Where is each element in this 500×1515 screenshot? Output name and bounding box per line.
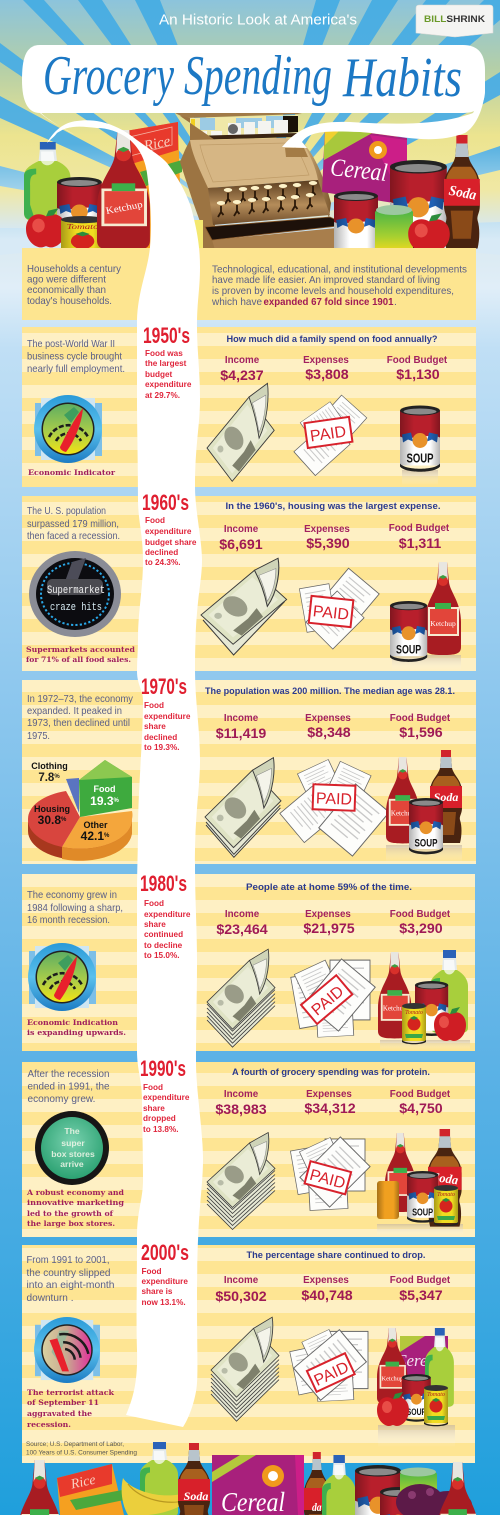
ribbon text: 1970s: share xyxy=(144,722,166,731)
text: intro right: expanded 67 fold since 1901 xyxy=(264,297,394,308)
stat: food budget: Food Budget xyxy=(390,1275,451,1286)
text: 1980s context xyxy=(27,890,123,926)
icon: food ketchup and soup: Ketchup xyxy=(430,619,456,628)
stat: food budget: Food Budget xyxy=(390,1089,451,1100)
label: clothing: % xyxy=(54,774,60,780)
ribbon text: 1990s: Food xyxy=(143,1083,163,1092)
ribbon text: 1950s: expenditure xyxy=(145,380,192,389)
icon: food group: Tomato xyxy=(427,1392,445,1398)
stat: income: $6,691 xyxy=(219,537,263,553)
icon: soup can: SOUP xyxy=(406,450,434,466)
label: other: 42.1 xyxy=(81,829,104,843)
ribbon text: 2000s: expenditure xyxy=(142,1277,188,1286)
text: 1980s context: 16 month recession. xyxy=(27,915,110,926)
icon: bananas xyxy=(122,1478,194,1515)
label: food: 19.3 xyxy=(90,794,114,808)
icon: soda right: Soda xyxy=(448,182,478,204)
icon: money xyxy=(201,558,287,655)
ribbon text: 1960s: Food xyxy=(145,516,165,525)
stat: income xyxy=(215,1275,267,1305)
icon: food ketchup and soup: SOUP xyxy=(396,642,421,656)
heading: 1980s: People ate at home 59% of the time. xyxy=(246,882,412,893)
icon: box stores badge: box stores xyxy=(51,1149,95,1159)
stat: food budget xyxy=(389,523,450,552)
text: 1980s context: The economy grew in xyxy=(27,890,117,901)
stat: food budget: Food Budget xyxy=(389,523,450,534)
stat: expenses: Expenses xyxy=(303,1275,349,1286)
icon: rice box: Rice xyxy=(69,1473,97,1493)
ribbon text: 2000s xyxy=(141,1240,189,1307)
label: clothing xyxy=(31,761,68,784)
caption: supermarkets xyxy=(26,645,135,664)
stat: expenses xyxy=(303,355,349,383)
icon: money xyxy=(211,1317,279,1421)
text: 1960s context xyxy=(27,506,120,542)
stat: income: Income xyxy=(224,524,259,535)
ribbon text: 1960s: budget share xyxy=(145,538,197,547)
caption: indication: Economic Indication xyxy=(27,1018,119,1027)
label: food: % xyxy=(114,798,120,804)
icon: food ketchup and soup xyxy=(390,562,461,670)
text: 1970s context: 1973, then declined until xyxy=(27,718,130,729)
stat: expenses xyxy=(301,1275,353,1304)
icon: ketchup large: Ketchup xyxy=(105,200,144,217)
subtitle: An Historic Look at America's xyxy=(159,12,357,28)
icon: food ketchup soda soup: Ketchup xyxy=(391,810,415,818)
icon: money xyxy=(207,1132,275,1230)
caption: terrorist attack: aggravated the xyxy=(27,1409,92,1418)
ribbon text: 1990s xyxy=(140,1056,190,1134)
text: 1980s context: 1984 following a sharp, xyxy=(27,903,123,914)
text: 1950s context: nearly full employment. xyxy=(27,364,125,375)
ribbon text: 1950s: budget xyxy=(145,370,173,379)
ribbon text: 2000s: Food xyxy=(142,1267,162,1276)
icon: green bottle xyxy=(24,142,70,221)
icon: food group xyxy=(378,950,470,1050)
text: 1990s context: After the recession xyxy=(28,1069,110,1080)
ribbon text: 2000s: share is xyxy=(142,1287,173,1296)
stat: food budget: $4,750 xyxy=(399,1101,443,1117)
stat: food budget xyxy=(390,1089,451,1117)
source note xyxy=(26,1441,138,1456)
icon: big can right xyxy=(390,160,447,249)
icon: paid receipts: PAID xyxy=(309,424,347,445)
label: housing: % xyxy=(61,817,67,823)
text: 1990s context: economy grew. xyxy=(28,1094,96,1105)
icon: red can center xyxy=(334,191,378,257)
stat: expenses xyxy=(303,909,355,937)
ribbon text: 1960s: expenditure xyxy=(145,527,192,536)
ribbon text: 1960s: to 24.3%. xyxy=(145,558,180,567)
icon: paid receipts xyxy=(280,759,389,856)
stat: income: $4,237 xyxy=(220,368,264,384)
keys xyxy=(217,181,317,217)
illustration: bottom food strip xyxy=(18,1442,478,1515)
stat: expenses: Expenses xyxy=(306,1089,352,1100)
icon: recession gauge xyxy=(34,1317,100,1383)
text: 1990s context: ended in 1991, the xyxy=(28,1082,110,1092)
stat: food budget: $1,596 xyxy=(399,725,443,741)
icon: food group: Cereal xyxy=(395,1351,441,1370)
icon: green bottle xyxy=(322,1455,355,1515)
icon: economic gauge xyxy=(28,943,96,1011)
panel: 1960s xyxy=(22,496,476,671)
stat: expenses xyxy=(304,1089,356,1117)
heading: 2000s: The percentage share continued to drop. xyxy=(246,1250,426,1261)
label: housing xyxy=(34,804,70,827)
text: intro right: which have xyxy=(211,297,262,308)
icon: box stores badge: The xyxy=(64,1126,80,1136)
text: intro left: Households a century xyxy=(27,264,122,275)
stat: food budget xyxy=(390,1275,451,1304)
stat: expenses: $3,808 xyxy=(305,367,349,383)
icon: food group: SOUP xyxy=(407,1407,426,1417)
label: housing: Housing xyxy=(34,804,70,814)
stat: expenses: $34,312 xyxy=(304,1101,356,1117)
text: 1950s context: The post-World War II xyxy=(27,339,115,350)
ribbon text: 1950s: 1950's xyxy=(143,323,190,348)
stat: expenses xyxy=(304,524,350,552)
text: intro left: economically than xyxy=(27,285,106,296)
text: 1970s context: 1975. xyxy=(27,731,50,742)
caption: economic indicator: Economic Indicator xyxy=(28,468,115,477)
ribbon text: 1980s: Food xyxy=(144,899,164,908)
stat: food budget: $3,290 xyxy=(399,921,443,937)
icon: green can xyxy=(400,1468,437,1503)
logo: BillShrink tag xyxy=(416,5,493,37)
stat: income: Income xyxy=(224,1089,259,1100)
stat: income xyxy=(219,524,263,553)
icon: food group: Tomato xyxy=(437,1192,455,1198)
caption: supermarkets: for 71% of all food sales. xyxy=(26,655,131,664)
icon: supermarket badge: Supermarket xyxy=(47,585,105,597)
stat: expenses: $5,390 xyxy=(306,536,350,552)
title xyxy=(43,45,462,109)
label: food: Food xyxy=(94,784,116,794)
icon: tomato can: Tomato xyxy=(67,223,99,231)
ribbon text: 1990s: share xyxy=(143,1104,165,1113)
icon: food ketchup soda soup: Soda xyxy=(434,790,458,804)
ribbon text: 1960s: declined xyxy=(145,548,178,557)
icon: paid receipts xyxy=(290,1330,368,1402)
icon: paid receipts xyxy=(291,959,375,1037)
ribbon text: 1970s: to 19.3%. xyxy=(144,743,180,752)
label: clothing: 7.8 xyxy=(38,772,54,784)
text: intro right: have made life easier. An improved standard of living xyxy=(212,275,440,286)
text: intro right: . xyxy=(394,297,397,308)
icon: soda: Soda xyxy=(184,1489,208,1503)
text: intro left: today's households. xyxy=(27,296,112,307)
ribbon text: 1990s: 1990's xyxy=(140,1056,186,1081)
panel: 1970s xyxy=(22,680,476,864)
text: intro right: is proven by income levels and household expenditures, xyxy=(212,286,454,297)
text: 1970s context xyxy=(27,694,134,742)
stat: income: Income xyxy=(224,713,259,724)
stat: food budget: $5,347 xyxy=(399,1288,443,1304)
stat: food budget: Food Budget xyxy=(390,713,451,724)
stat: income: Income xyxy=(225,355,260,366)
label: clothing: Clothing xyxy=(31,761,68,771)
text: intro left xyxy=(27,264,122,307)
icon: food group: Ketchup xyxy=(383,1005,407,1013)
ribbon text: 1980s xyxy=(140,871,191,960)
icon: food group xyxy=(377,1328,455,1447)
text: 2000s context: From 1991 to 2001, xyxy=(26,1255,110,1266)
ribbon text: 1980s: 1980's xyxy=(140,871,187,896)
ribbon text: 1950s: the largest xyxy=(145,359,187,368)
panel: 1980s xyxy=(22,874,475,1051)
icon: food group: Ketchup xyxy=(382,1376,403,1382)
stat: expenses: Expenses xyxy=(303,355,349,366)
ribbon text: 1970s xyxy=(141,674,191,752)
icon: soda right xyxy=(444,135,480,248)
chart: household spending pie xyxy=(28,760,132,861)
text: 1990s context xyxy=(28,1069,110,1105)
icon: paid receipts xyxy=(290,1137,370,1210)
title: Habits xyxy=(342,47,462,109)
text: 2000s context: the country slipped xyxy=(26,1268,111,1279)
stat: food budget: Food Budget xyxy=(390,909,451,920)
stat: income: Income xyxy=(224,1275,259,1286)
icon: food group xyxy=(377,1129,463,1235)
label: housing: 30.8 xyxy=(38,813,61,827)
ribbon text: 1980s: to decline xyxy=(144,941,183,950)
stat: food budget: Food Budget xyxy=(387,355,448,366)
text: 2000s context xyxy=(26,1255,115,1304)
panel: 2000s xyxy=(22,1245,475,1463)
icon: food group: Tomato xyxy=(405,1010,423,1016)
label: other xyxy=(81,820,110,843)
icon: paid receipts xyxy=(294,395,367,476)
icon: green bottle xyxy=(140,1442,178,1515)
icon: soup can xyxy=(400,406,440,485)
ribbon text: 1980s: expenditure xyxy=(144,910,191,919)
stat: expenses: Expenses xyxy=(304,524,350,535)
icon: soda: da xyxy=(312,1501,322,1514)
icon: food group: SOUP xyxy=(412,1207,433,1218)
text: 1960s context: The U. S. population xyxy=(27,506,106,517)
ribbon text: 1990s: to 13.8%. xyxy=(143,1125,178,1134)
icon: box stores badge: super xyxy=(61,1138,85,1148)
icon: tomato can xyxy=(61,216,104,266)
ribbon text: 1980s: share xyxy=(144,920,166,929)
panel: 1990s xyxy=(22,1062,475,1237)
stat: income: $50,302 xyxy=(215,1289,267,1305)
icon: food ketchup soda soup xyxy=(386,750,462,862)
icon: box stores badge: arrive xyxy=(60,1159,84,1169)
icon: supermarket badge: craze hits xyxy=(50,602,102,614)
illustration: header groceries and cash register xyxy=(24,109,480,266)
source note: 100 Years of U.S. Consumer Spending xyxy=(26,1450,138,1456)
stat: income: Income xyxy=(225,909,260,920)
icon: paid receipts: PAID xyxy=(312,603,350,624)
ribbon text: 2000s: now 13.1%. xyxy=(142,1298,186,1307)
icon: cereal box: Cereal xyxy=(329,154,389,187)
text: 1970s context: In 1972–73, the economy xyxy=(27,694,134,705)
icon: box stores badge xyxy=(35,1111,109,1185)
stat: expenses: $21,975 xyxy=(303,921,355,937)
icon: soda xyxy=(178,1443,210,1515)
text: 2000s context: into an eight-month xyxy=(26,1280,115,1291)
caption: terrorist attack: recession. xyxy=(27,1420,71,1429)
caption: indication: is expanding upwards. xyxy=(27,1028,126,1037)
caption: terrorist attack: of September 11 xyxy=(27,1398,99,1407)
caption: terrorist attack: The terrorist attack xyxy=(27,1388,115,1397)
icon: paid receipts: PAID xyxy=(312,1359,352,1390)
icon: paid receipts: PAID xyxy=(316,790,352,809)
text: 1970s context: expanded. It peaked in xyxy=(27,706,122,717)
icon: money xyxy=(207,383,274,481)
stat: expenses: $8,348 xyxy=(307,725,351,741)
panel: intro xyxy=(22,248,476,320)
stat: expenses xyxy=(305,713,351,741)
stat: income: $38,983 xyxy=(215,1102,267,1118)
stat: food budget: $1,130 xyxy=(396,367,440,383)
icon: soda xyxy=(304,1452,330,1515)
stat: income: $23,464 xyxy=(216,922,268,938)
banner: title ribbon xyxy=(22,45,485,113)
stat: expenses: Expenses xyxy=(305,713,351,724)
icon: paid receipts: PAID xyxy=(309,983,347,1019)
ribbon text: 1990s: dropped xyxy=(143,1114,176,1123)
text: 1950s context xyxy=(27,339,125,375)
stat: expenses: $40,748 xyxy=(301,1288,353,1304)
icon: ketchup bottom left xyxy=(18,1460,61,1515)
heading: 1970s: The population was 200 million. The median age was 28.1. xyxy=(205,686,455,697)
text: intro left: ago were different xyxy=(27,274,106,286)
stat: expenses: Expenses xyxy=(305,909,351,920)
heading: 1990s: A fourth of grocery spending was for protein. xyxy=(232,1067,430,1078)
heading: 1960s: In the 1960's, housing was the largest expense. xyxy=(226,501,440,512)
logo: BillShrink tag: BILLSHRINK xyxy=(424,14,485,25)
caption: box stores: the large box stores. xyxy=(27,1219,115,1228)
icon: economic gauge xyxy=(34,395,102,463)
source note: Source; U.S. Department of Labor, xyxy=(26,1441,124,1448)
caption: supermarkets: Supermarkets accounted xyxy=(26,645,135,654)
icon: rice box xyxy=(57,1464,124,1515)
stat: income xyxy=(215,1089,267,1118)
ribbon text: 1970s: declined xyxy=(144,733,177,742)
text: 1960s context: surpassed 179 million, xyxy=(27,519,119,530)
text: 1950s context: business cycle brought xyxy=(27,352,122,362)
caption: box stores: A robust economy and xyxy=(26,1188,124,1197)
stat: income: $11,419 xyxy=(216,726,266,742)
ribbon text: 1950s: Food was xyxy=(145,349,183,358)
text: intro right xyxy=(211,264,467,308)
icon: cereal box xyxy=(212,1455,304,1515)
stat: food budget xyxy=(390,713,451,741)
stat: food budget xyxy=(390,909,451,937)
ribbon text: 2000s: 2000's xyxy=(141,1240,189,1265)
caption: indication xyxy=(27,1018,126,1037)
ribbon text: 1970s: expenditure xyxy=(144,712,191,721)
label: other: % xyxy=(104,833,110,839)
stat: income xyxy=(220,355,264,384)
icon: ketchup large xyxy=(97,130,150,251)
heading: 1950s question: How much did a family spend on food annually? xyxy=(226,334,438,345)
icon: money xyxy=(205,758,281,857)
icon: food group: Soda xyxy=(432,1170,459,1187)
icon: grapes xyxy=(396,1484,472,1515)
icon: cereal box xyxy=(322,127,407,205)
stat: income xyxy=(216,713,266,742)
panel: 1950s xyxy=(22,327,476,487)
ribbon text: 1970s: Food xyxy=(144,701,164,710)
icon: cans xyxy=(355,1465,416,1515)
text: 2000s context: downturn . xyxy=(26,1293,74,1304)
caption: box stores xyxy=(26,1188,124,1228)
text: 1960s context: then faced a recession. xyxy=(27,531,120,542)
icon: money xyxy=(207,949,275,1047)
icon: apple right xyxy=(408,213,450,252)
icon: cash register xyxy=(175,109,347,250)
title: Spending xyxy=(184,45,332,107)
ribbon text: 1980s: continued xyxy=(144,930,183,939)
icon: rice box xyxy=(120,122,182,250)
ribbon text: 1980s: to 15.0%. xyxy=(144,951,180,960)
caption: box stores: led to the growth of xyxy=(27,1209,114,1218)
ribbon text: 1960s: 1960's xyxy=(142,490,189,515)
caption: terrorist attack xyxy=(27,1388,115,1429)
stat: income xyxy=(216,909,268,938)
label: food xyxy=(90,784,120,808)
icon: ketchup bottom right xyxy=(437,1462,478,1515)
text: intro right: Technological, educational, and institutional developments xyxy=(212,264,467,276)
ribbon text: 1990s: expenditure xyxy=(143,1093,190,1102)
icon: paid receipts xyxy=(299,568,379,649)
icon: supermarket badge xyxy=(29,551,121,637)
icon: paid receipts: PAID xyxy=(308,1167,347,1193)
ribbon text: 1970s: 1970's xyxy=(141,674,187,699)
icon: food ketchup soda soup: SOUP xyxy=(415,837,437,849)
icon: rice box: Rice xyxy=(141,133,172,155)
ribbon text: 1950s: at 29.7%. xyxy=(145,391,180,400)
ribbon text: 1950s xyxy=(143,323,192,400)
stat: food budget xyxy=(387,355,448,383)
label: other: Other xyxy=(83,820,108,830)
icon: apple left xyxy=(26,208,66,247)
title: Grocery xyxy=(43,45,174,107)
icon: red can left xyxy=(57,177,102,243)
ribbon text: 1960s xyxy=(142,490,197,567)
caption: box stores: innovative marketing xyxy=(27,1198,124,1207)
stat: food budget: $1,311 xyxy=(399,536,441,552)
icon: green soda can xyxy=(375,205,413,250)
